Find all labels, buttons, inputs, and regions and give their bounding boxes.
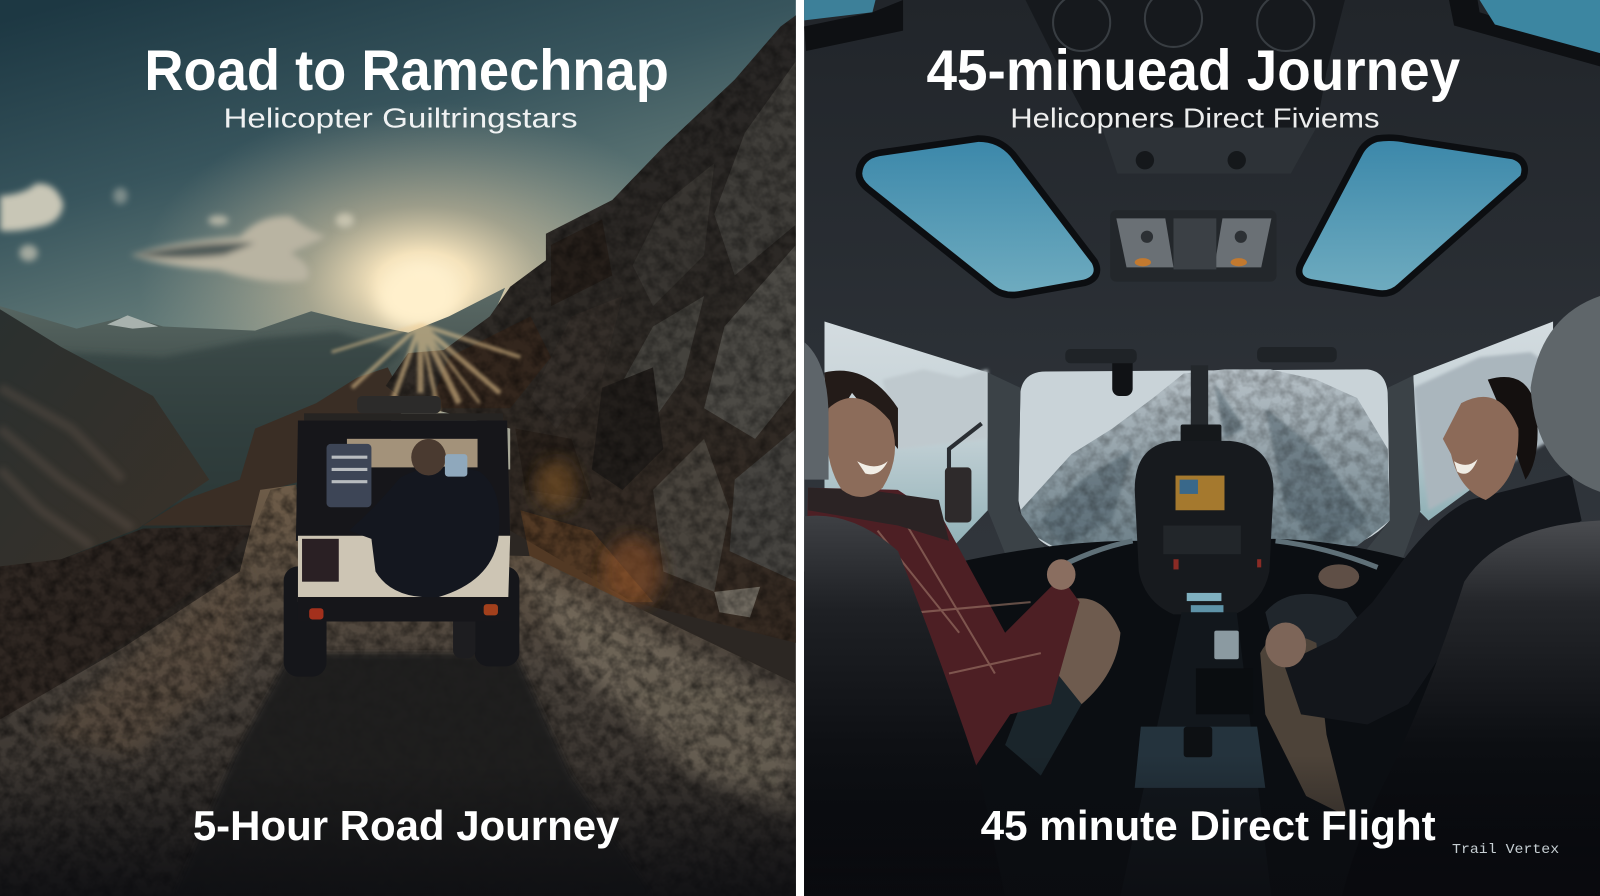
left shorts [1005, 653, 1082, 776]
hands [1265, 623, 1306, 667]
clouds [0, 184, 354, 282]
overhead gauge panel [1026, 0, 1345, 173]
smile [1454, 459, 1478, 474]
watermark: Trail Vertex [1452, 842, 1559, 858]
cabin ceiling [804, 0, 1600, 896]
plaid shirt [806, 488, 1080, 776]
left knee [1036, 598, 1120, 714]
white body [298, 536, 510, 602]
base ground colour [57, 469, 796, 896]
hair [824, 371, 898, 449]
sun core [375, 280, 459, 332]
rear-view mirror [1112, 349, 1133, 396]
dash edge [1051, 541, 1378, 571]
road surface [0, 485, 796, 896]
left road tone [54, 634, 230, 753]
right cliff [386, 15, 796, 643]
left window mountains [883, 369, 988, 449]
smile [857, 461, 888, 474]
bumper [298, 597, 510, 621]
left title: Road to Ramechnap [144, 39, 669, 103]
bottom fade [804, 755, 1600, 896]
face [827, 398, 895, 497]
jeep [284, 396, 519, 677]
mountain texture [1020, 369, 1390, 551]
right road highlight [520, 571, 796, 816]
left skylight [862, 142, 1094, 292]
left seat and headrest [804, 342, 1005, 896]
hill ridges [0, 388, 133, 546]
panel: helicopter cabin photo [804, 0, 1600, 896]
road and bank texture [0, 480, 796, 896]
cab frame [296, 420, 510, 541]
rock spur behind jeep [143, 367, 408, 526]
right side window [1413, 321, 1553, 520]
face [1443, 397, 1518, 500]
door mirror [945, 424, 982, 522]
rear window glow [347, 439, 478, 467]
roof rack and luggage [304, 413, 503, 420]
passenger and spare wheel [349, 467, 500, 597]
hand [1047, 559, 1076, 590]
left subtitle: Helicopter Guiltringstars [223, 103, 578, 134]
black jacket [1284, 475, 1582, 725]
windshield [1018, 369, 1390, 551]
cliff rock facets [429, 61, 796, 617]
right skylight [1302, 141, 1521, 290]
luggage in cab [327, 444, 371, 507]
instrument console [1135, 425, 1273, 614]
centre console [1120, 612, 1271, 896]
mountain shadow facets [1041, 383, 1367, 546]
windows [824, 321, 1553, 551]
right caption: 45 minute Direct Flight [981, 802, 1436, 849]
left side window [824, 321, 988, 551]
right title: 45-minuead Journey [927, 39, 1460, 103]
upper vents [1065, 349, 1137, 363]
right window mountains [1413, 352, 1553, 510]
bottom fade [0, 781, 796, 896]
cliff texture [378, 10, 796, 648]
left caption: 5-Hour Road Journey [193, 802, 620, 849]
window pillars [988, 372, 1420, 566]
hair [1488, 377, 1538, 480]
snow peak [107, 315, 158, 329]
sky [0, 0, 796, 469]
jeep shadow on road [196, 650, 613, 862]
rear tyres [284, 566, 327, 677]
centre pillar [1191, 365, 1208, 429]
overhead switch console [1110, 218, 1276, 282]
top corner skylights [804, 0, 1600, 66]
right subtitle: Helicopners Direct Fiviems [1010, 103, 1380, 134]
sun rays [332, 325, 520, 413]
cabin floor and dashboard coaming [804, 539, 1600, 896]
right passenger [1260, 377, 1582, 816]
panel: road journey photo [0, 0, 796, 896]
right legs [1265, 594, 1367, 663]
lens flares [536, 460, 661, 606]
left foreground hill [0, 309, 209, 571]
distant mountains [0, 288, 505, 571]
windshield mountains [1020, 369, 1390, 551]
right seat and headrest [1342, 296, 1600, 896]
sun glow [164, 115, 627, 413]
left passenger [806, 371, 1120, 776]
left rock bank [0, 526, 251, 572]
collar [808, 488, 949, 541]
middle ridge [72, 330, 400, 414]
